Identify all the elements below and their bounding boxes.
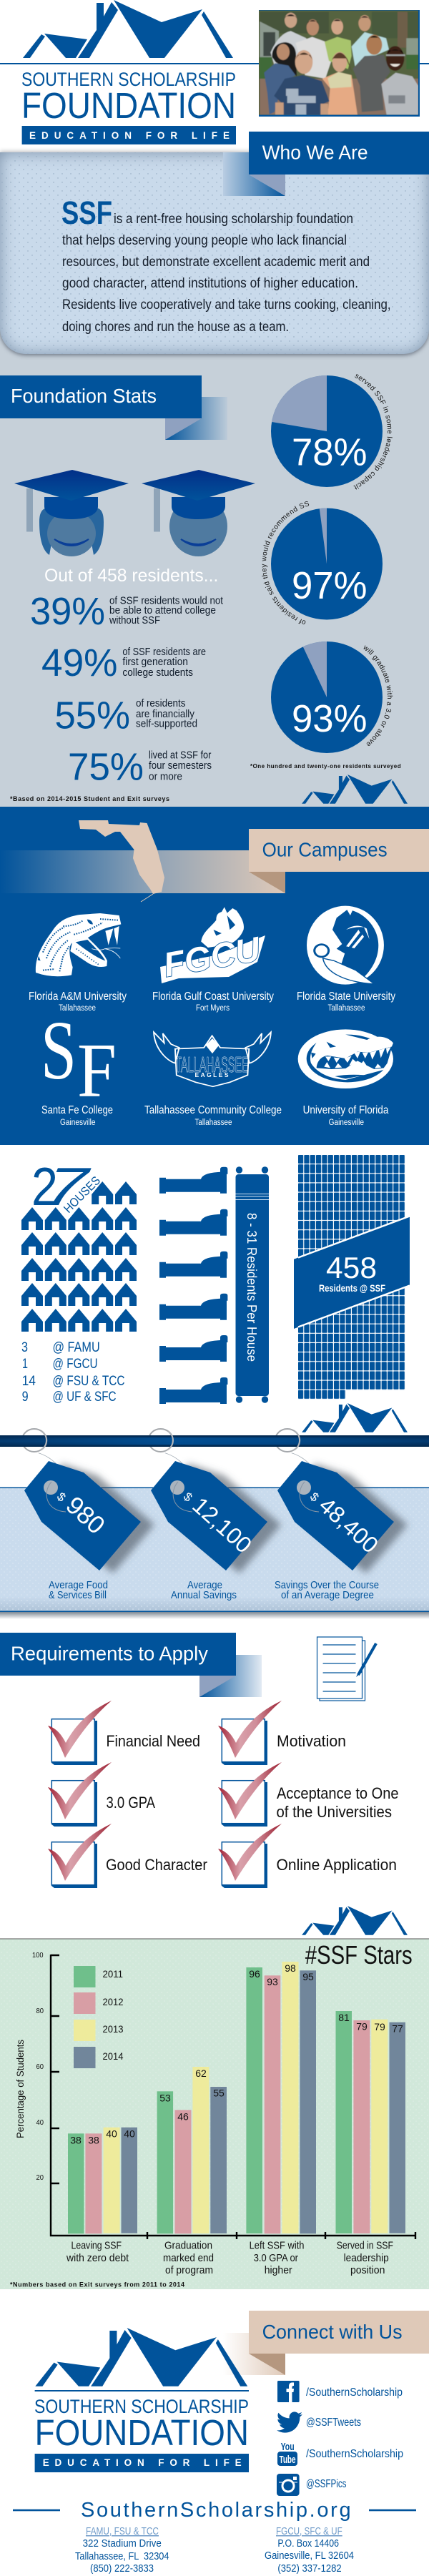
rings behind rail (22, 1429, 300, 1452)
footnote: survey count: *One hundred and twenty-one residents surveyed (250, 763, 401, 770)
logo: FGCU eagle (160, 907, 265, 985)
icon: application form and pen (317, 1637, 376, 1701)
legend: houses per campus: 3 (21, 1339, 28, 1355)
icon: youtube: You (281, 2441, 295, 2453)
stat: 75 percent: or more (149, 771, 182, 782)
logo: UF gator (298, 1029, 393, 1088)
text: facebook handle: /SouthernScholarship (306, 2386, 403, 2399)
graphic: 458 residents grid: Residents @ SSF (319, 1282, 385, 1294)
bars: leaving with zero debt: 38 (70, 2134, 82, 2145)
photo: residents group (257, 7, 422, 117)
logo: Santa Fe College: F (77, 1028, 117, 1114)
text: gainesville address (265, 2525, 354, 2575)
text block: who we are: doing chores and run the house as a team. (62, 320, 289, 335)
y axis labels: 80 (36, 2007, 44, 2015)
text: north florida address: (850) 222-3833 (90, 2562, 154, 2575)
labels: first row campuses: Tallahassee (59, 1004, 96, 1013)
checklist: left column: Financial Need (106, 1732, 200, 1750)
bars: leaving with zero debt: 38 (88, 2134, 99, 2145)
icons: side beds (159, 1167, 227, 1404)
tag: 980 food bill: $ (54, 1490, 69, 1505)
y axis labels: 40 (36, 2119, 44, 2127)
text: gainesville address: P.O. Box 14406 (277, 2537, 339, 2550)
x axis labels: Left SSF with (250, 2240, 305, 2251)
y axis labels: 100 (32, 1952, 44, 1960)
horizontal header rule (0, 63, 429, 64)
stat: 39 percent: without SSF (109, 614, 160, 626)
graphic: 27 houses: 2 (31, 1156, 58, 1216)
icon: graduate with short hair (142, 470, 255, 556)
icon: graduate with long hair (14, 470, 129, 556)
panel: who we are background (0, 152, 429, 354)
bars: graduation marked end: 55 (213, 2087, 225, 2098)
logo: FSU seminole (307, 906, 384, 985)
labels: first row campuses: Florida State University (297, 990, 395, 1003)
x axis labels (66, 2240, 393, 2276)
stat: 39 percent (30, 590, 224, 633)
tag: 12,100 annual savings (151, 1453, 267, 1570)
text block: who we are: that helps deserving young people who lack financial (62, 233, 347, 248)
tag: 12,100 annual savings: $ (181, 1490, 195, 1505)
heading: requirements to apply (0, 1633, 262, 1697)
bars: left with 3.0 gpa: 95 (302, 1971, 314, 1982)
stat: 75 percent (68, 745, 212, 788)
graphic: 27 houses (21, 1156, 137, 1332)
labels: second row campuses: Tallahassee Community College (144, 1104, 282, 1116)
text block: who we are: Residents live cooperatively and take turns cooking, cleaning, (62, 298, 390, 313)
checklist: right column: Online Application (276, 1856, 397, 1874)
x axis labels: leadership (344, 2252, 389, 2264)
pie chart: 78 percent leadership: served SSF in some leadership capacity (353, 374, 393, 490)
legend: houses per campus: 9 (22, 1389, 29, 1405)
bars: served in leadership: 79 (374, 2021, 385, 2032)
y axis labels: 60 (36, 2063, 44, 2071)
bars: left with 3.0 gpa: 93 (267, 1976, 278, 1987)
logo: FGCU eagle: FGCU (161, 930, 264, 985)
text: out of 458 residents: Out of 458 residents... (44, 566, 218, 586)
graphic: 458 residents grid: 458 (326, 1251, 377, 1284)
tag: 48,400 degree savings: 48,400 (314, 1492, 383, 1558)
pie chart: 93 percent graduate (271, 641, 393, 753)
labels: first row campuses: Tallahassee (327, 1004, 365, 1013)
icon: twitter (277, 2412, 302, 2433)
text block: who we are (61, 195, 390, 335)
logo: header: FOUNDATION (21, 85, 236, 126)
graphic: 27 houses: 7 (34, 1156, 100, 1216)
bars: served in leadership: 81 (338, 2012, 350, 2023)
y axis labels: Percentage of Students (15, 2040, 26, 2138)
logo: footer: SOUTHERN SCHOLARSHIP (34, 2396, 249, 2417)
tag: 980 food bill: 980 (61, 1491, 110, 1540)
pie chart: 97 percent recommend (262, 501, 383, 624)
icon: youtube (277, 2441, 297, 2466)
roof icon: housing (302, 1403, 408, 1432)
legend: houses per campus: @ FAMU (53, 1339, 100, 1355)
heading: who we are: Who We Are (262, 142, 368, 164)
checklist: right column: Acceptance to One (277, 1784, 399, 1802)
logo: header: SOUTHERN SCHOLARSHIP (21, 69, 236, 90)
tag: 980 food bill (24, 1453, 141, 1570)
pie chart: 93 percent graduate: will graduate with a 3.0 or above (363, 645, 393, 746)
labels: first row campuses: Florida Gulf Coast University (152, 990, 274, 1003)
logo: TCC eagles: EAGLES (194, 1071, 229, 1078)
logo: header (21, 0, 236, 144)
bars: left with 3.0 gpa (246, 1962, 316, 2233)
checklist: right column: Motivation (277, 1732, 346, 1750)
tag: 48,400 degree savings: $ (307, 1490, 322, 1505)
captions: savings (49, 1579, 379, 1601)
bars: graduation marked end: 53 (159, 2093, 171, 2104)
bars: served in leadership: 79 (356, 2021, 368, 2032)
logo: TCC eagles: TALLAHASSEE (175, 1052, 249, 1077)
pie chart: 97 percent recommend: 97% (292, 564, 368, 607)
text: website: SouthernScholarship.org (81, 2499, 351, 2522)
y axis labels: 20 (36, 2174, 44, 2182)
labels: first row campuses: Fort Myers (196, 1004, 230, 1013)
x axis labels: Graduation (164, 2240, 212, 2251)
text: youtube handle: /SouthernScholarship (306, 2448, 403, 2460)
stat: 49 percent (41, 641, 206, 684)
heading: our campuses: Our Campuses (262, 839, 388, 861)
pie chart: 78 percent leadership (271, 374, 393, 490)
legend: 2013 (103, 2023, 124, 2035)
labels: first row campuses: Florida A&M University (29, 990, 127, 1003)
heading: who we are (249, 132, 429, 174)
stat: 55 percent: 55% (54, 694, 130, 737)
logo: TCC eagles (154, 1032, 271, 1086)
checklist: right column (218, 1701, 399, 1888)
logo: FAMU rattler (36, 913, 121, 976)
captions: savings: Annual Savings (171, 1589, 237, 1601)
roof icon: stats (302, 775, 408, 804)
bars: leaving with zero debt: 40 (106, 2128, 117, 2140)
stat: 55 percent: are financially (136, 708, 194, 720)
logo: footer: EDUCATION FOR LIFE (43, 2457, 242, 2468)
text block: who we are: SSF (61, 195, 112, 231)
x axis labels: Served in SSF (337, 2240, 393, 2251)
text: instagram handle: @SSFPics (306, 2478, 346, 2490)
background: foundation stats (0, 315, 429, 807)
stat: 55 percent (54, 694, 197, 737)
text block: who we are: good character, attend institutions of higher education. (62, 276, 358, 291)
captions: savings: Average Food (49, 1579, 108, 1591)
who we are fold and dots (0, 152, 429, 354)
text: north florida address: FAMU, FSU & TCC (86, 2525, 159, 2537)
checklist: right column: of the Universities (276, 1803, 392, 1821)
text block: who we are: is a rent-free housing scholarship foundation (114, 212, 353, 227)
bars: left with 3.0 gpa: 98 (285, 1962, 296, 1974)
chart axes (51, 1955, 416, 2239)
legend: houses per campus (21, 1339, 124, 1405)
heading: foundation stats: Foundation Stats (11, 385, 157, 407)
legend: houses per campus: @ FGCU (53, 1356, 97, 1372)
captions: savings: Savings Over the Course (275, 1579, 379, 1591)
checklist: left column (48, 1701, 207, 1888)
roof icon: requirements (302, 1906, 408, 1935)
heading: foundation stats (0, 375, 227, 440)
labels: second row campuses: University of Florida (303, 1104, 389, 1116)
footnote: exit surveys: *Numbers based on Exit surveys from 2011 to 2014 (10, 2281, 184, 2289)
pie chart: 78 percent leadership: 78% (292, 431, 368, 473)
graphic: 27 houses: HOUSES (61, 1174, 103, 1216)
x axis labels: marked end (163, 2252, 214, 2264)
text: gainesville address: Gainesville, FL 32604 (265, 2550, 354, 2562)
x axis labels: 3.0 GPA or (254, 2252, 298, 2264)
legend: 2014 (103, 2050, 124, 2062)
panel: ssf stars background (0, 1938, 429, 2289)
logo: footer: FOUNDATION (35, 2412, 249, 2453)
rail (0, 1435, 429, 1447)
bars: left with 3.0 gpa: 96 (249, 1968, 260, 1980)
x axis labels: higher (265, 2264, 292, 2276)
heading: connect with us (223, 2311, 429, 2375)
pie chart: 97 percent recommend: of residents said they would recommend SSF (262, 501, 309, 624)
labels: second row campuses: Gainesville (329, 1119, 364, 1127)
labels: second row campuses: Tallahassee (194, 1119, 232, 1127)
logo: header: EDUCATION FOR LIFE (29, 130, 230, 141)
tag: 12,100 annual savings: 12,100 (187, 1492, 257, 1558)
icon: instagram (277, 2474, 300, 2496)
legend: 2011 (103, 1968, 123, 1980)
bars: graduation marked end: 62 (195, 2068, 207, 2079)
y axis labels (15, 1952, 44, 2182)
panel: savings background (0, 1488, 429, 1619)
labels: second row campuses: Gainesville (60, 1119, 96, 1127)
stat: 39 percent: be able to attend college (109, 604, 216, 616)
bars: graduation marked end (157, 2067, 227, 2233)
legend: houses per campus: 1 (22, 1356, 28, 1372)
icon: top-view bed with residents per house (236, 1166, 269, 1403)
legend: houses per campus: @ FSU & TCC (53, 1373, 124, 1389)
legend: 2012 (103, 1996, 124, 2007)
stat: 75 percent: four semesters (149, 759, 212, 772)
stat: 55 percent: self-supported (136, 718, 197, 730)
stat: 75 percent: lived at SSF for (149, 749, 211, 762)
logo: Santa Fe College: S (41, 1003, 77, 1097)
stat: 39 percent: of SSF residents would not (109, 594, 224, 606)
bars: leaving with zero debt: 40 (124, 2128, 135, 2140)
checklist: left column: 3.0 GPA (106, 1794, 155, 1811)
icon: florida map (79, 820, 164, 902)
legend (74, 1966, 124, 2068)
text: twitter handle: @SSFTweets (306, 2417, 361, 2429)
captions: savings: Average (187, 1579, 222, 1591)
text: gainesville address: FGCU, SFC & UF (276, 2525, 342, 2537)
panel: our campuses background (0, 807, 429, 1145)
heading: requirements to apply: Requirements to Apply (11, 1643, 208, 1665)
icon: top-view bed with residents per house: 8 - 31 Residents Per House (245, 1213, 259, 1362)
stat: 55 percent: of residents (136, 697, 186, 709)
text: gainesville address: (352) 337-1282 (277, 2562, 342, 2575)
labels: second row campuses: Santa Fe College (41, 1104, 113, 1116)
stat: 49 percent: first generation (122, 656, 188, 668)
tag: 48,400 degree savings (277, 1453, 394, 1570)
legend: houses per campus: @ UF & SFC (53, 1389, 116, 1405)
bars: served in leadership (336, 2011, 405, 2233)
x axis labels: of program (165, 2264, 213, 2276)
bars: graduation marked end: 46 (177, 2111, 189, 2123)
text: north florida address (75, 2525, 169, 2575)
labels: second row campuses (41, 1104, 389, 1127)
stat: 49 percent: college students (122, 667, 193, 679)
logo: footer (34, 2328, 249, 2472)
heading: our campuses (0, 829, 429, 893)
stat: 49 percent: 49% (41, 641, 117, 684)
text block: who we are: resources, but demonstrate excellent academic merit and (62, 255, 370, 270)
icon: facebook (277, 2381, 300, 2402)
stat: 49 percent: of SSF residents are (122, 646, 206, 658)
pie chart: 93 percent graduate: 93% (292, 697, 368, 740)
x axis labels: Leaving SSF (72, 2240, 122, 2251)
checklist: left column: Good Character (106, 1856, 207, 1874)
legend: houses per campus: 14 (22, 1373, 36, 1389)
ring fronts (41, 1431, 300, 1450)
heading: connect with us: Connect with Us (262, 2321, 403, 2343)
graphic: 458 residents grid (294, 1155, 410, 1400)
captions: savings: of an Average Degree (281, 1589, 374, 1601)
text: north florida address: 322 Stadium Drive (83, 2537, 162, 2550)
bars: served in leadership: 77 (392, 2022, 403, 2034)
stat: 75 percent: 75% (68, 745, 144, 788)
logo: Santa Fe College (41, 1003, 117, 1114)
bars: leaving with zero debt (68, 2128, 137, 2233)
bar chart: ssf stars (15, 1952, 416, 2276)
x axis labels: with zero debt (66, 2252, 129, 2264)
stat: 39 percent: 39% (30, 590, 105, 633)
labels: first row campuses (29, 990, 395, 1013)
text: north florida address: Tallahassee, FL 32304 (75, 2550, 169, 2562)
captions: savings: & Services Bill (49, 1589, 107, 1601)
icon: youtube: Tube (279, 2454, 296, 2466)
footnote: surveys: *Based on 2014-2015 Student and Exit surveys (10, 795, 169, 802)
x axis labels: position (350, 2264, 385, 2276)
